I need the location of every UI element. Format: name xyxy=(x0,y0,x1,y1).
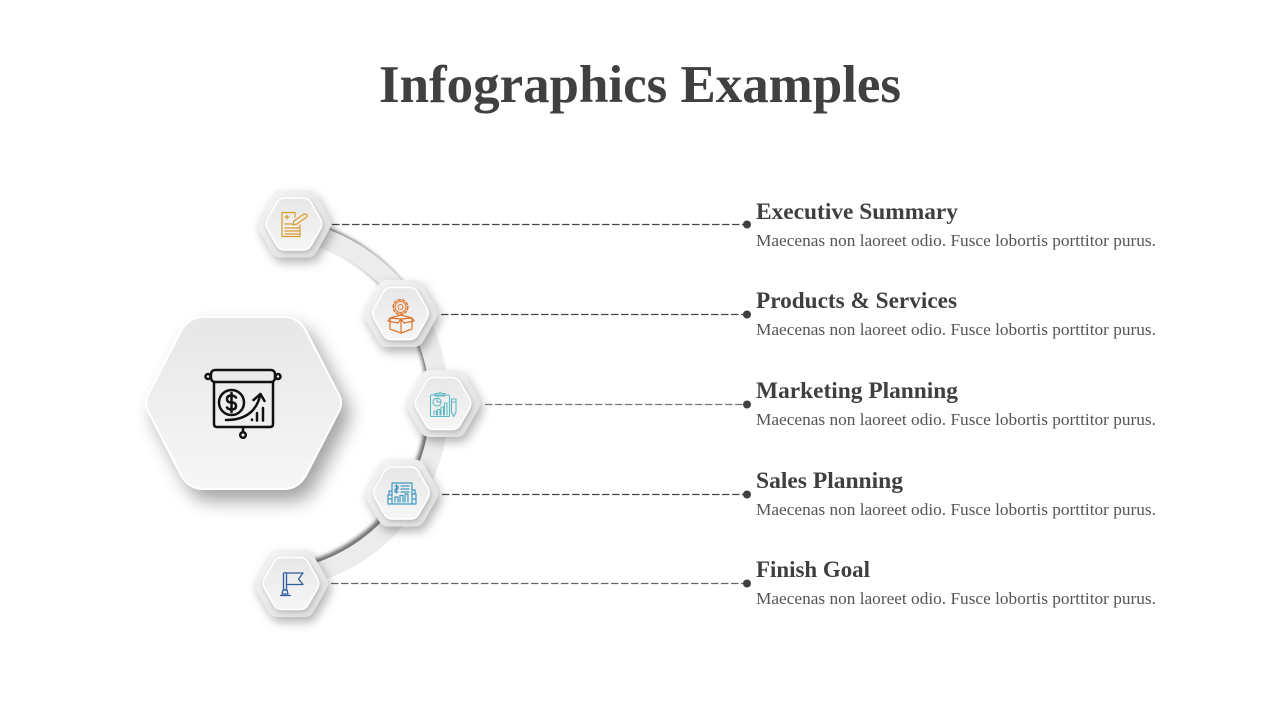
text block: marketing planning xyxy=(756,378,1156,429)
connector: finish goal xyxy=(331,580,751,588)
text block: sales planning: Sales Planning xyxy=(756,468,904,493)
text block: marketing planning: Marketing Planning xyxy=(756,378,959,403)
node: products and services xyxy=(364,280,437,347)
title: Infographics Examples xyxy=(379,56,901,114)
icon: flag xyxy=(280,572,303,596)
text block: products and services xyxy=(756,288,1156,339)
icon: gear over open box xyxy=(388,300,414,333)
text block: finish goal: Maecenas non laoreet odio. Fusce lobortis porttitor purus. xyxy=(756,589,1156,608)
node: marketing planning xyxy=(406,370,480,437)
text block: sales planning: Maecenas non laoreet odio. Fusce lobortis porttitor purus. xyxy=(756,500,1156,519)
connector: marketing planning xyxy=(485,400,751,408)
node: finish goal xyxy=(254,550,328,617)
connector: products and services xyxy=(441,310,751,318)
text block: executive summary xyxy=(756,199,1156,250)
icon: document with pencil xyxy=(282,212,307,236)
text block: marketing planning: Maecenas non laoreet odio. Fusce lobortis porttitor purus. xyxy=(756,410,1156,429)
text block: sales planning xyxy=(756,468,1156,519)
text block: finish goal: Finish Goal xyxy=(756,557,870,582)
text block: executive summary: Executive Summary xyxy=(756,199,959,224)
connector: sales planning xyxy=(442,490,751,498)
node: executive summary xyxy=(257,190,331,258)
icon: presentation board with dollar and growth arrow xyxy=(206,370,280,438)
node: sales planning xyxy=(365,460,438,526)
text block: products and services: Maecenas non laoreet odio. Fusce lobortis porttitor purus. xyxy=(756,320,1156,339)
icon: clipboard with chart and pencil xyxy=(430,392,456,416)
text block: products and services: Products & Services xyxy=(756,288,957,313)
curved connector band xyxy=(312,232,439,573)
text block: executive summary: Maecenas non laoreet odio. Fusce lobortis porttitor purus. xyxy=(756,231,1156,250)
text block: finish goal xyxy=(756,557,1156,608)
icon: financial report with coins xyxy=(388,483,416,504)
central hexagon xyxy=(146,317,341,489)
connector: executive summary xyxy=(332,220,751,228)
